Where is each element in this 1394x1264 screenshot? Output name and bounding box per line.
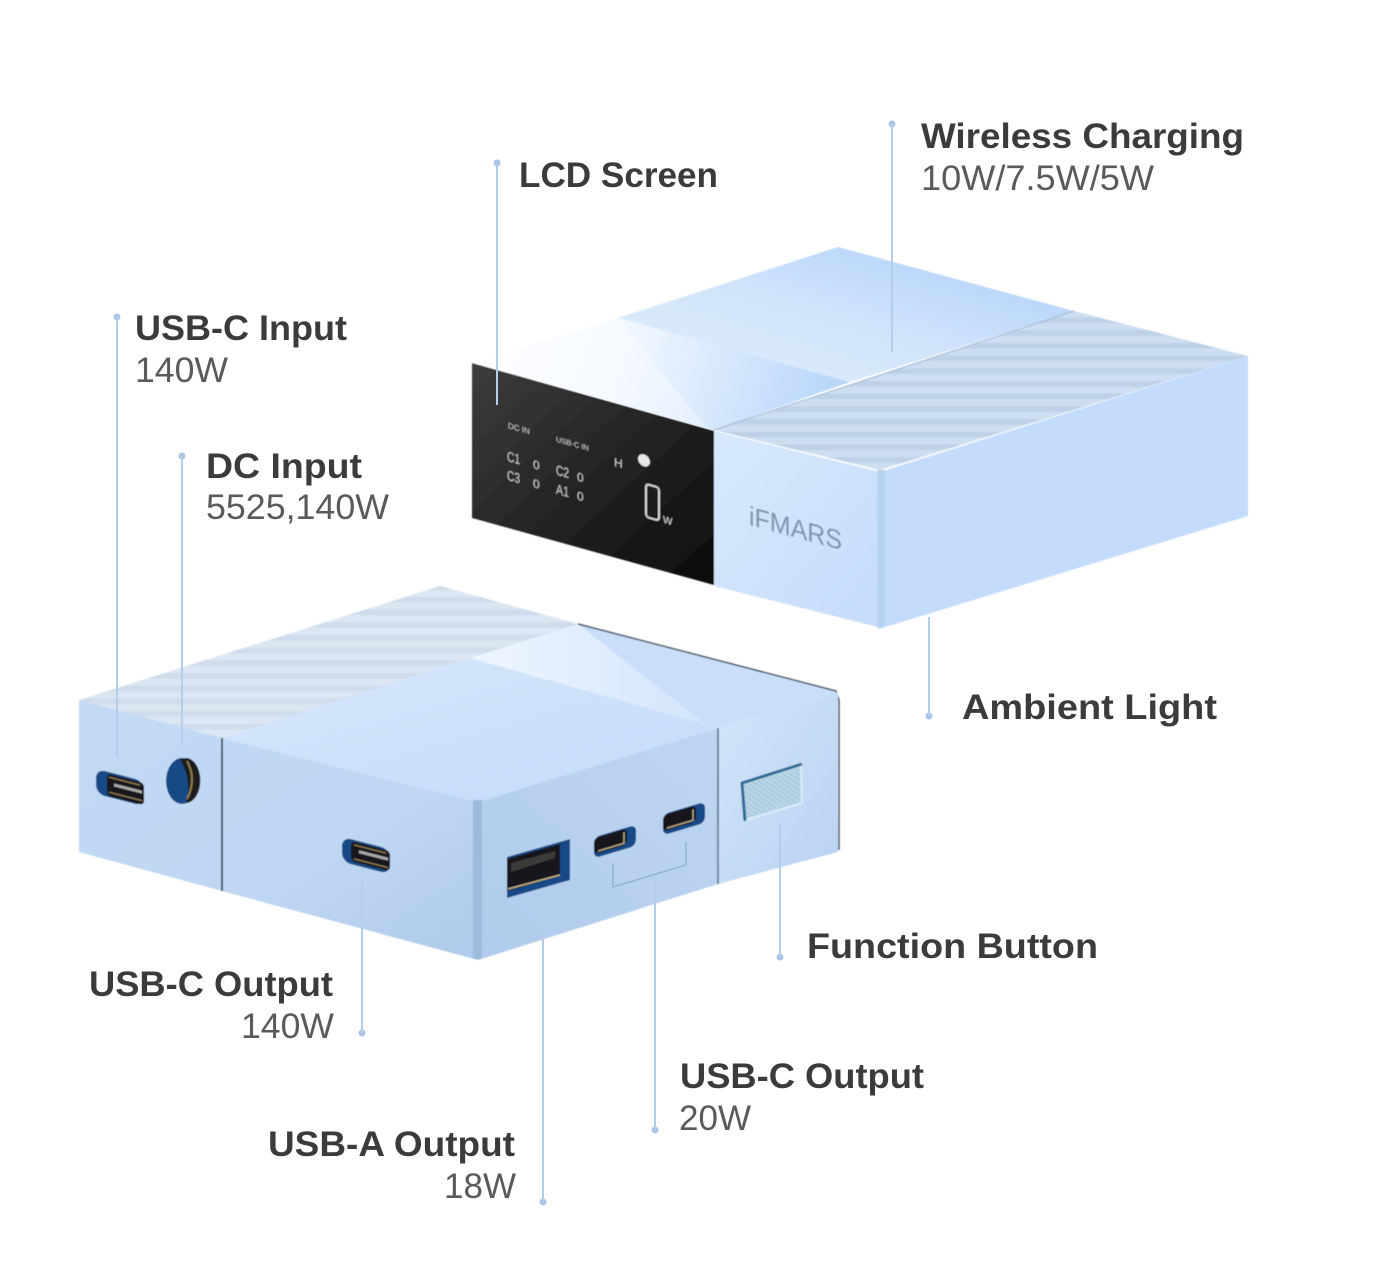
LCD readouts: C1 xyxy=(507,449,520,468)
right face xyxy=(478,728,718,960)
label: Wireless Charging xyxy=(921,117,1244,198)
LCD readouts: 0 xyxy=(533,457,540,473)
port: USB-C input xyxy=(96,769,144,806)
label: USB-C Output 20W: 20W xyxy=(679,1099,751,1138)
glass top panel xyxy=(472,318,850,430)
corner edge xyxy=(877,470,885,629)
seam at hatched panel xyxy=(714,311,1074,430)
hatched top panel xyxy=(714,311,1248,470)
label: USB-C Output 140W: 140W xyxy=(241,1007,334,1046)
label: LCD Screen: LCD Screen xyxy=(519,156,718,195)
LCD readouts: w xyxy=(662,511,673,528)
label: Wireless Charging: 10W/7.5W/5W xyxy=(921,159,1154,198)
label: USB-C Output 140W: USB-C Output xyxy=(89,965,333,1004)
leader: USB-C output 140W xyxy=(358,880,366,1036)
leader: ambient light xyxy=(926,617,932,720)
LCD screen xyxy=(472,363,714,585)
label: Ambient Light: Ambient Light xyxy=(962,688,1217,727)
label: DC Input: 5525,140W xyxy=(206,488,389,527)
glass top panel xyxy=(470,624,838,728)
button end face xyxy=(718,692,838,884)
LCD readouts: H xyxy=(614,455,623,471)
leader: USB-C input xyxy=(114,314,120,757)
leader: USB-A output xyxy=(540,905,546,1206)
device: bottom view with ports xyxy=(79,586,839,960)
LCD readouts: C2 xyxy=(556,463,569,482)
label: DC Input: DC Input xyxy=(206,447,362,486)
hatched top panel xyxy=(79,586,578,738)
device: top view with LCD xyxy=(472,247,1248,629)
leader: function button xyxy=(776,823,784,960)
label: USB-A Output 18W xyxy=(268,1125,516,1206)
corner edge xyxy=(473,800,482,960)
LCD readouts: A1 xyxy=(556,482,569,501)
LCD readouts: 0 xyxy=(577,470,584,485)
label: USB-C Input: USB-C Input xyxy=(135,309,347,348)
LCD readouts: USB-C IN xyxy=(556,435,589,453)
LCD readouts: 0 xyxy=(533,476,540,492)
port: USB-C output 20W left xyxy=(594,825,636,858)
top rear dark edge xyxy=(578,624,839,850)
port: DC input xyxy=(166,758,200,804)
left face xyxy=(79,700,478,960)
port: USB-A output xyxy=(507,839,570,898)
LCD readouts xyxy=(507,416,673,530)
label: USB-A Output 18W: 18W xyxy=(444,1167,516,1206)
LCD readouts: 0 xyxy=(577,489,584,504)
main top panel xyxy=(222,658,718,802)
long side face xyxy=(880,356,1248,628)
LCD readouts: DC IN xyxy=(508,421,530,436)
leader: wireless charging xyxy=(888,120,896,352)
seam by function button xyxy=(717,728,719,884)
label: USB-C Output 20W: USB-C Output xyxy=(680,1057,924,1096)
label: USB-C Output 20W xyxy=(679,1057,924,1138)
label: DC Input xyxy=(206,447,389,527)
label: USB-A Output 18W: USB-A Output xyxy=(268,1125,515,1164)
iFMARS logo: iFMARS xyxy=(749,500,842,556)
leader: LCD screen xyxy=(494,160,500,405)
label: USB-C Input: 140W xyxy=(135,351,228,390)
label: Wireless Charging: Wireless Charging xyxy=(921,117,1244,156)
seam between input and output sections xyxy=(221,738,223,891)
logo end face xyxy=(714,431,882,628)
leader: USB-C output 20W with bracket xyxy=(613,842,686,1134)
LCD readouts: C3 xyxy=(507,468,520,487)
label: USB-C Output 140W xyxy=(89,965,334,1046)
port: USB-C output 140W xyxy=(342,837,390,874)
wireless charging panel xyxy=(618,247,1074,382)
function button xyxy=(742,764,802,821)
leader: DC input xyxy=(178,452,186,745)
port: USB-C output 20W right xyxy=(663,802,705,835)
label: Function Button: Function Button xyxy=(807,927,1098,966)
label: USB-C Input xyxy=(135,309,347,390)
